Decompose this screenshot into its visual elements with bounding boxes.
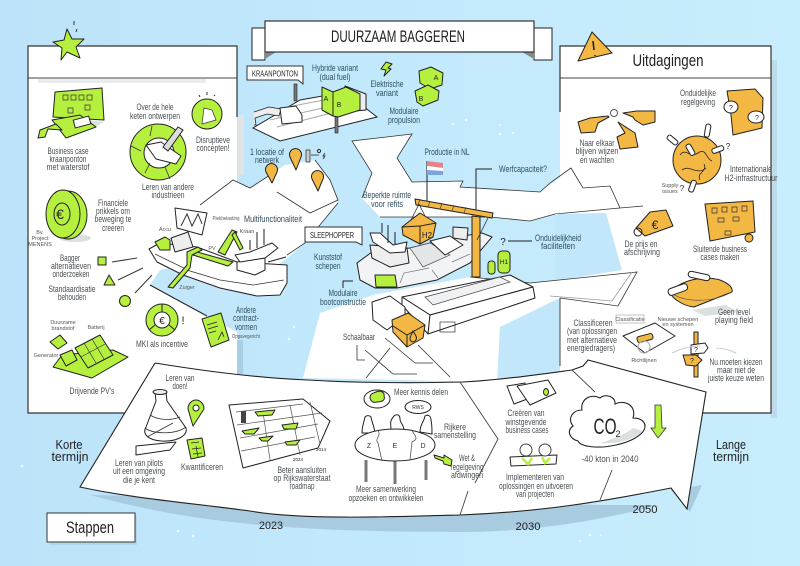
- text: implementeren: oplossingen en uitvoeren: [499, 481, 573, 492]
- icon: mki wheel: !: [181, 315, 185, 327]
- label: stappen: [47, 513, 137, 545]
- text: andere contractvormen: contract-: [233, 313, 259, 324]
- icon: star: [53, 21, 84, 60]
- text: leren van pilots: [113, 458, 165, 486]
- text: lange termijn: termijn: [713, 449, 749, 464]
- text: onduidelijkheid: Onduidelijkheid: [535, 233, 581, 244]
- text: ship labels left: Kraan: [240, 229, 254, 235]
- illustration: kraanponton: A: [324, 96, 329, 103]
- text: beperkte ruimte: [363, 190, 411, 210]
- text: kunststof schepen: [314, 252, 342, 272]
- text: leren van doen: Leren van: [166, 373, 194, 384]
- text: meer samenwerking: Meer samenwerking: [356, 484, 416, 495]
- text: creeren van: [505, 408, 549, 436]
- icon: business case board: [38, 88, 104, 138]
- icon: arrow down: [651, 405, 666, 438]
- text: implementeren: Implementeren van: [506, 472, 564, 483]
- text: korte termijn: termijn: [52, 449, 88, 464]
- text: 1 locatie: [250, 147, 284, 166]
- text: hybride: Hybride variant: [312, 63, 358, 74]
- text: years: 2030: [516, 521, 540, 533]
- text: kunststof schepen: Kunststof: [314, 252, 342, 263]
- text: meer samenwerking: [348, 484, 424, 504]
- icon: roadmap: [229, 399, 330, 468]
- text: ship labels left: PV: [208, 246, 216, 252]
- text: internationale: Internationale: [730, 164, 772, 175]
- text: nu moeten kiezen: maar niet de: [717, 365, 755, 376]
- timeline arrow: stappen: [80, 360, 706, 532]
- text: internationale: [724, 164, 778, 184]
- icon: mki wheel: [146, 304, 185, 336]
- text: elektrische: Elektrische: [370, 79, 404, 90]
- icon: h1 tank: [488, 237, 532, 274]
- icon: price tag: [634, 210, 673, 236]
- illustration: kraanponton: B: [337, 102, 342, 109]
- text: schaalbaar: [343, 332, 450, 378]
- text: classificeren: (van oplossingen: [567, 326, 617, 337]
- text: implementeren: van projecten: [516, 489, 554, 500]
- icon: pointing hands: [578, 110, 655, 149]
- text: implementeren: [499, 472, 573, 500]
- text: naar elkaar: [576, 138, 618, 166]
- icon: closing business case board: [705, 201, 755, 242]
- icon: classification plate: en systemen: [662, 322, 694, 328]
- label: sleephopper: SLEEPHOPPER: [310, 230, 354, 240]
- text: leren van pilots: Leren van pilots: [115, 458, 163, 469]
- text: project menens: Bv.: [36, 230, 44, 236]
- text: rijkere samenstelling: samenstelling: [434, 430, 476, 441]
- text: business case: Business case: [48, 146, 88, 157]
- icon: roadmap: 2014: [316, 447, 327, 452]
- text: geen level: Geen level: [718, 307, 750, 318]
- panel: uitdagingen (right): [560, 46, 777, 418]
- text: classificeren: met alternatieve: [567, 335, 617, 346]
- text: rijkere samenstelling: Rijkere: [444, 422, 466, 433]
- text: elektrische: [370, 79, 404, 99]
- icon: bolt: [381, 62, 392, 76]
- text: creeren van: winstgevende: [505, 417, 546, 428]
- icon: signpost: ?: [690, 358, 694, 365]
- text: lange termijn: [713, 437, 749, 464]
- text: business case: met waterstof: [46, 162, 90, 173]
- illustration: crane with h2 container: H2: [422, 231, 433, 240]
- text: geen level: playing field: [715, 315, 753, 326]
- label: sleephopper: [305, 227, 362, 245]
- icon: modular cubes: A: [434, 75, 439, 82]
- label: kraanponton: [247, 66, 303, 84]
- text: beter aansluiten: Beter aansluiten: [278, 465, 326, 476]
- text: classificeren: Classificeren: [574, 318, 612, 329]
- icon: globe with pins: [666, 124, 731, 193]
- text: years: 2050: [632, 504, 658, 516]
- text: lange termijn: Lange: [716, 437, 746, 452]
- text: onduidelijkheid: faciliteiten: [541, 241, 575, 252]
- text: disruptieve: concepten!: [196, 143, 230, 154]
- text: -40 kton: -40 kton in 2040: [582, 454, 638, 465]
- icon: h1 tank: ?: [500, 237, 506, 248]
- text: andere contractvormen: vormen: [235, 322, 257, 333]
- text: werfcapaciteit: Werfcapaciteit?: [499, 164, 547, 175]
- icon: people at table: Z: [367, 443, 372, 450]
- text: leren van andere: [142, 182, 194, 201]
- icon: co2 cloud: [569, 396, 645, 447]
- icon: business case papers: [507, 380, 556, 405]
- panel: uitdagingen (right): Uitdagingen: [632, 51, 704, 70]
- icon: classification plate: Classificatie: [615, 317, 645, 323]
- text: meer kennis delen: Meer kennis delen: [394, 387, 448, 398]
- icon: co2 cloud: CO: [594, 414, 616, 439]
- icon: h1 tank: H1: [500, 259, 509, 266]
- text: standaardisatie: [48, 284, 96, 303]
- text: over de hele keten: [130, 102, 180, 122]
- icons: location pins: [265, 149, 325, 191]
- text: pv labels: Duurzame: [50, 320, 76, 326]
- icon: contract book: [202, 313, 229, 347]
- text: project menens: [28, 230, 52, 248]
- text: hybride: (dual fuel): [320, 72, 350, 83]
- text: kwantificeren: Kwantificeren: [181, 462, 223, 473]
- text: nu moeten kiezen: [707, 357, 764, 384]
- text: project menens: Project: [31, 236, 49, 242]
- icon: euro coin: €: [56, 206, 64, 222]
- icon: light bulbs on ribbon: [510, 444, 557, 466]
- icon: classification plate: Richtlijnen: [631, 358, 657, 364]
- text: ship labels left: Multifunctionaliteit: [244, 214, 302, 225]
- text: over de hele keten: Over de hele: [136, 102, 174, 113]
- text: beter aansluiten: [274, 465, 331, 492]
- text: standaardisatie: behouden: [58, 292, 86, 303]
- label: kraanponton: KRAANPONTON: [252, 68, 298, 78]
- icon: mki wheel: €: [159, 316, 165, 327]
- text: beperkte ruimte: Beperkte ruimte: [363, 190, 411, 201]
- text: sluitende: [693, 244, 747, 263]
- illustration: factory building: [372, 275, 535, 347]
- title banner: DUURZAAM BAGGEREN: [331, 27, 465, 46]
- text: schaalbaar: Schaalbaar: [343, 332, 375, 343]
- text: supply issues: Supply: [662, 183, 679, 189]
- text: werfcapaciteit: [476, 164, 547, 215]
- text: bagger alternatieven: [51, 253, 91, 280]
- icon: signpost: ?: [694, 347, 698, 354]
- icon: document with question clouds: ?: [755, 115, 759, 122]
- icon: globe with pins: ?: [726, 142, 731, 151]
- text: leren van pilots: uit een omgeving: [113, 466, 165, 477]
- text: financiele prikkels: creeren: [102, 223, 124, 234]
- text: naar elkaar: blijven wijzen: [576, 146, 618, 157]
- text: ship labels left: Accu: [159, 227, 171, 233]
- text: years: 2023: [259, 520, 283, 532]
- text: leren van andere: industrieen: [152, 190, 184, 201]
- icon: co2 cloud: 2: [615, 429, 621, 439]
- text: beter aansluiten: op Rijkswaterstaat: [274, 473, 331, 484]
- icon: signpost: [672, 332, 736, 377]
- text: geen level: [715, 307, 753, 326]
- text: disruptieve: [196, 135, 230, 154]
- text: bagger alternatieven: alternatieven: [51, 261, 91, 272]
- text: years: [259, 504, 658, 533]
- text: onduidelijke regelgeving: regelgeving: [681, 97, 715, 108]
- text: financiele prikkels: [94, 198, 132, 234]
- icon: globe with pins: ?: [680, 184, 685, 193]
- text: leren van doen: [166, 373, 194, 392]
- icon: recycling ring with ship: [130, 124, 186, 180]
- text: leren van pilots: die je kent: [123, 475, 155, 486]
- text: classificeren: energiedragers): [567, 343, 615, 354]
- text: de prijs: De prijs en: [624, 239, 658, 250]
- text: wet en regelgeving: afdwingen: [451, 470, 483, 481]
- text: pv labels: Generator: [34, 353, 59, 359]
- text: wet en regelgeving: [450, 453, 484, 481]
- text: onduidelijke regelgeving: [680, 88, 716, 108]
- text: productie: Productie in NL: [424, 147, 470, 158]
- text: de prijs: [624, 239, 660, 258]
- text: onduidelijkheid: [535, 233, 581, 252]
- text: hybride: [312, 63, 358, 83]
- text: nu moeten kiezen: juiste keuze weten: [707, 373, 764, 384]
- icon: price tag: €: [652, 218, 659, 232]
- text: andere contractvormen: Andere: [236, 305, 256, 316]
- text: over de hele keten: keten ontwerpen: [130, 111, 180, 122]
- text: financiele prikkels: Financiele: [98, 198, 128, 209]
- text: modulaire propulsion: Modulaire: [390, 106, 418, 117]
- text: naar elkaar: en wachten: [580, 155, 614, 166]
- text: modulaire bootconstructie: Modulaire: [328, 288, 358, 299]
- icon: lime pin: [188, 400, 204, 426]
- text: modulaire bootconstructie: bootconstructie: [320, 297, 366, 308]
- text: pv labels: [34, 320, 115, 397]
- panel: kansen (left): [28, 46, 244, 413]
- text: mki: MKI als incentive: [136, 339, 188, 350]
- icon: disruptive bulb: [192, 92, 222, 129]
- text: naar elkaar: Naar elkaar: [580, 138, 614, 149]
- text: korte termijn: Korte: [56, 437, 82, 452]
- text: leren van doen: doen!: [172, 381, 188, 392]
- icon: classification plate: [615, 315, 698, 364]
- text: pv labels: Drijvende PV's: [70, 386, 115, 397]
- text: andere contractvormen: Opgavegericht: [232, 334, 260, 340]
- text: modulaire propulsion: [388, 106, 420, 126]
- text: wet en regelgeving: regelgeving: [450, 462, 484, 473]
- label: stappen: Stappen: [66, 518, 114, 537]
- illustration: crane with h2 container: [402, 199, 493, 277]
- text: classificeren: [567, 318, 617, 354]
- text: pv labels: brandstof: [52, 326, 75, 332]
- text: financiele prikkels: beweging te: [94, 214, 132, 225]
- text: onduidelijke regelgeving: Onduidelijke: [680, 88, 716, 99]
- icon: level playing field: [667, 271, 740, 316]
- text: beter aansluiten: roadmap: [290, 481, 314, 492]
- icon: modular cubes: [415, 67, 443, 106]
- text: standaardisatie: Standaardisatie: [48, 284, 96, 295]
- text: 1 locatie: netwerk: [255, 155, 279, 166]
- text: ship labels left: Zuiger: [179, 285, 195, 291]
- text: wet en regelgeving: Wet &: [459, 453, 475, 464]
- text: 1 locatie: 1 locatie of: [250, 147, 284, 158]
- text: pv labels: Batterij: [87, 325, 105, 331]
- icon: roadmap: 2024: [293, 457, 304, 462]
- text: andere contractvormen: [232, 305, 260, 340]
- icon: people at table: E: [393, 443, 398, 450]
- text: project menens: MENENS: [28, 242, 52, 248]
- icon: drijvende pv: [50, 335, 128, 378]
- text: bagger alternatieven: Bagger: [60, 253, 80, 264]
- text: modulaire bootconstructie: [320, 281, 366, 308]
- icon: warning triangle: [578, 32, 612, 61]
- icon: document with question clouds: ?: [729, 105, 733, 112]
- icon: classification plate: Nieuwe schepen: [658, 317, 698, 323]
- text: meer samenwerking: opzoeken en ontwikkelen: [348, 493, 424, 504]
- icon: euro coin: [46, 190, 91, 242]
- text: modulaire propulsion: propulsion: [388, 115, 420, 126]
- text: rijkere samenstelling: [434, 422, 476, 441]
- illustration: kraanponton: [253, 84, 377, 141]
- text: bagger alternatieven: onderzoeken: [52, 269, 90, 280]
- map: land and water: [150, 134, 643, 384]
- text: ship labels left: [159, 214, 302, 291]
- icon: shapes: [98, 257, 152, 306]
- text: korte termijn: [52, 437, 88, 464]
- text: creeren van: business cases: [506, 425, 549, 436]
- icon: flask: [136, 390, 186, 455]
- icon: document with question clouds: [724, 89, 764, 135]
- text: de prijs: afschrijving: [624, 247, 660, 258]
- illustration: central ship: [357, 223, 492, 288]
- icon: people at table: RWS: [412, 405, 424, 411]
- text: leren van andere: Leren van andere: [142, 182, 194, 193]
- text: business case: kraanponton: [50, 154, 86, 165]
- illustration: sleephopper left ship: [149, 208, 287, 296]
- text: business case: [46, 146, 90, 173]
- icon: calculator: [187, 438, 205, 459]
- text: financiele prikkels: prikkels om: [96, 206, 130, 217]
- text: beperkte ruimte: voor refits: [371, 199, 403, 210]
- text: kunststof schepen: schepen: [316, 261, 340, 272]
- text: ship labels left: Piekbelasting: [212, 216, 240, 222]
- text: supply issues: issues: [662, 189, 678, 195]
- icon: people at table: [355, 390, 452, 484]
- icon: modular cubes: B: [419, 96, 424, 103]
- text: internationale: H2-infrastructuur: [724, 173, 778, 184]
- text: sluitende: Sluitende business: [693, 244, 747, 255]
- text: nu moeten kiezen: Nu moeten kiezen: [710, 357, 762, 368]
- icon: dutch flag: [427, 161, 443, 205]
- text: creeren van: Creëren van: [508, 408, 544, 419]
- icon: people at table: D: [420, 443, 426, 450]
- title banner: [252, 21, 552, 60]
- text: disruptieve: Disruptieve: [196, 135, 230, 146]
- text: supply issues: [662, 183, 679, 195]
- text: sluitende: cases maken: [700, 252, 740, 263]
- text: elektrische: variant: [376, 88, 398, 99]
